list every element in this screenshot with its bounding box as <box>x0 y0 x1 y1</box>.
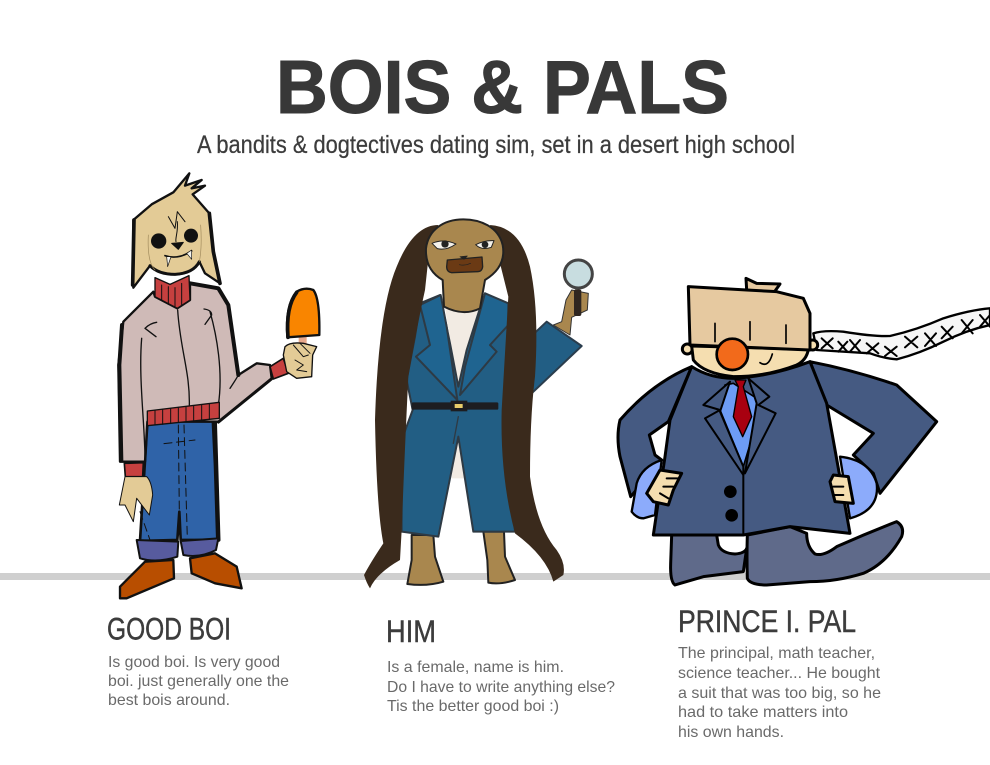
head and neck <box>426 219 503 312</box>
shirt cuffs <box>632 457 877 518</box>
character: Good Boi <box>118 173 319 598</box>
scarf <box>813 308 990 359</box>
shirt <box>445 307 478 478</box>
description: Good Boi: Is good boi. Is very good <box>108 654 280 671</box>
popsicle <box>287 289 319 347</box>
buttons <box>724 485 737 498</box>
name: Prince I. Pal: PRINCE I. PAL <box>678 603 856 639</box>
eyes <box>151 233 166 249</box>
right cuff <box>270 358 288 379</box>
coat sleeve <box>517 322 582 393</box>
eyes <box>432 241 494 249</box>
head <box>133 173 220 288</box>
hair tuft <box>746 278 780 293</box>
description: Him: Is a female, name is him. <box>387 659 564 676</box>
subtitle: A bandits & dogtectives dating sim, set in a desert high school <box>197 131 795 159</box>
pants <box>140 417 217 541</box>
description: Him: Do I have to write anything else? <box>387 679 615 696</box>
hands <box>647 470 853 505</box>
description: Prince I. Pal: science teacher... He bought <box>678 665 881 682</box>
jacket hem <box>147 402 219 426</box>
left hand <box>119 477 153 522</box>
pant cuffs <box>137 538 218 560</box>
description: Good Boi: boi. just generally one the <box>108 673 289 690</box>
lapels <box>416 293 508 400</box>
left cuff <box>124 463 143 477</box>
description: Prince I. Pal <box>678 645 881 741</box>
nose <box>717 339 748 370</box>
legs <box>671 535 747 585</box>
description: Prince I. Pal: his own hands. <box>678 724 784 741</box>
jacket <box>653 362 850 535</box>
description: Prince I. Pal: had to take matters into <box>678 704 848 721</box>
description: Good Boi: best bois around. <box>108 692 230 709</box>
lapels <box>703 378 776 475</box>
muzzle <box>447 257 483 273</box>
title: BOIS & PALS <box>276 45 729 129</box>
shirt and tie <box>720 383 758 467</box>
jacket <box>118 283 272 462</box>
belt <box>412 401 498 411</box>
description: Prince I. Pal: The principal, math teacher, <box>678 645 875 662</box>
description: Prince I. Pal: a suit that was too big, so he <box>678 685 881 702</box>
name: Good Boi: GOOD BOI <box>107 610 231 646</box>
character: Prince I. Pal <box>618 278 990 585</box>
nose and mouth <box>172 242 183 249</box>
coat body <box>402 293 515 537</box>
eye <box>760 354 772 364</box>
hair <box>364 225 564 588</box>
legs <box>407 532 515 585</box>
character: Him <box>364 219 592 588</box>
magnifying glass and hand <box>553 260 592 335</box>
head block <box>688 287 810 350</box>
name: Him: HIM <box>386 613 436 649</box>
description: Him <box>387 659 615 715</box>
ears <box>682 344 692 354</box>
arms <box>618 362 937 497</box>
right hand <box>283 343 317 378</box>
description: Good Boi <box>108 654 289 709</box>
shoes <box>120 553 242 598</box>
ground line <box>0 573 990 580</box>
collar <box>155 276 190 308</box>
description: Him: Tis the better good boi :) <box>387 698 559 715</box>
lower face <box>692 346 808 377</box>
